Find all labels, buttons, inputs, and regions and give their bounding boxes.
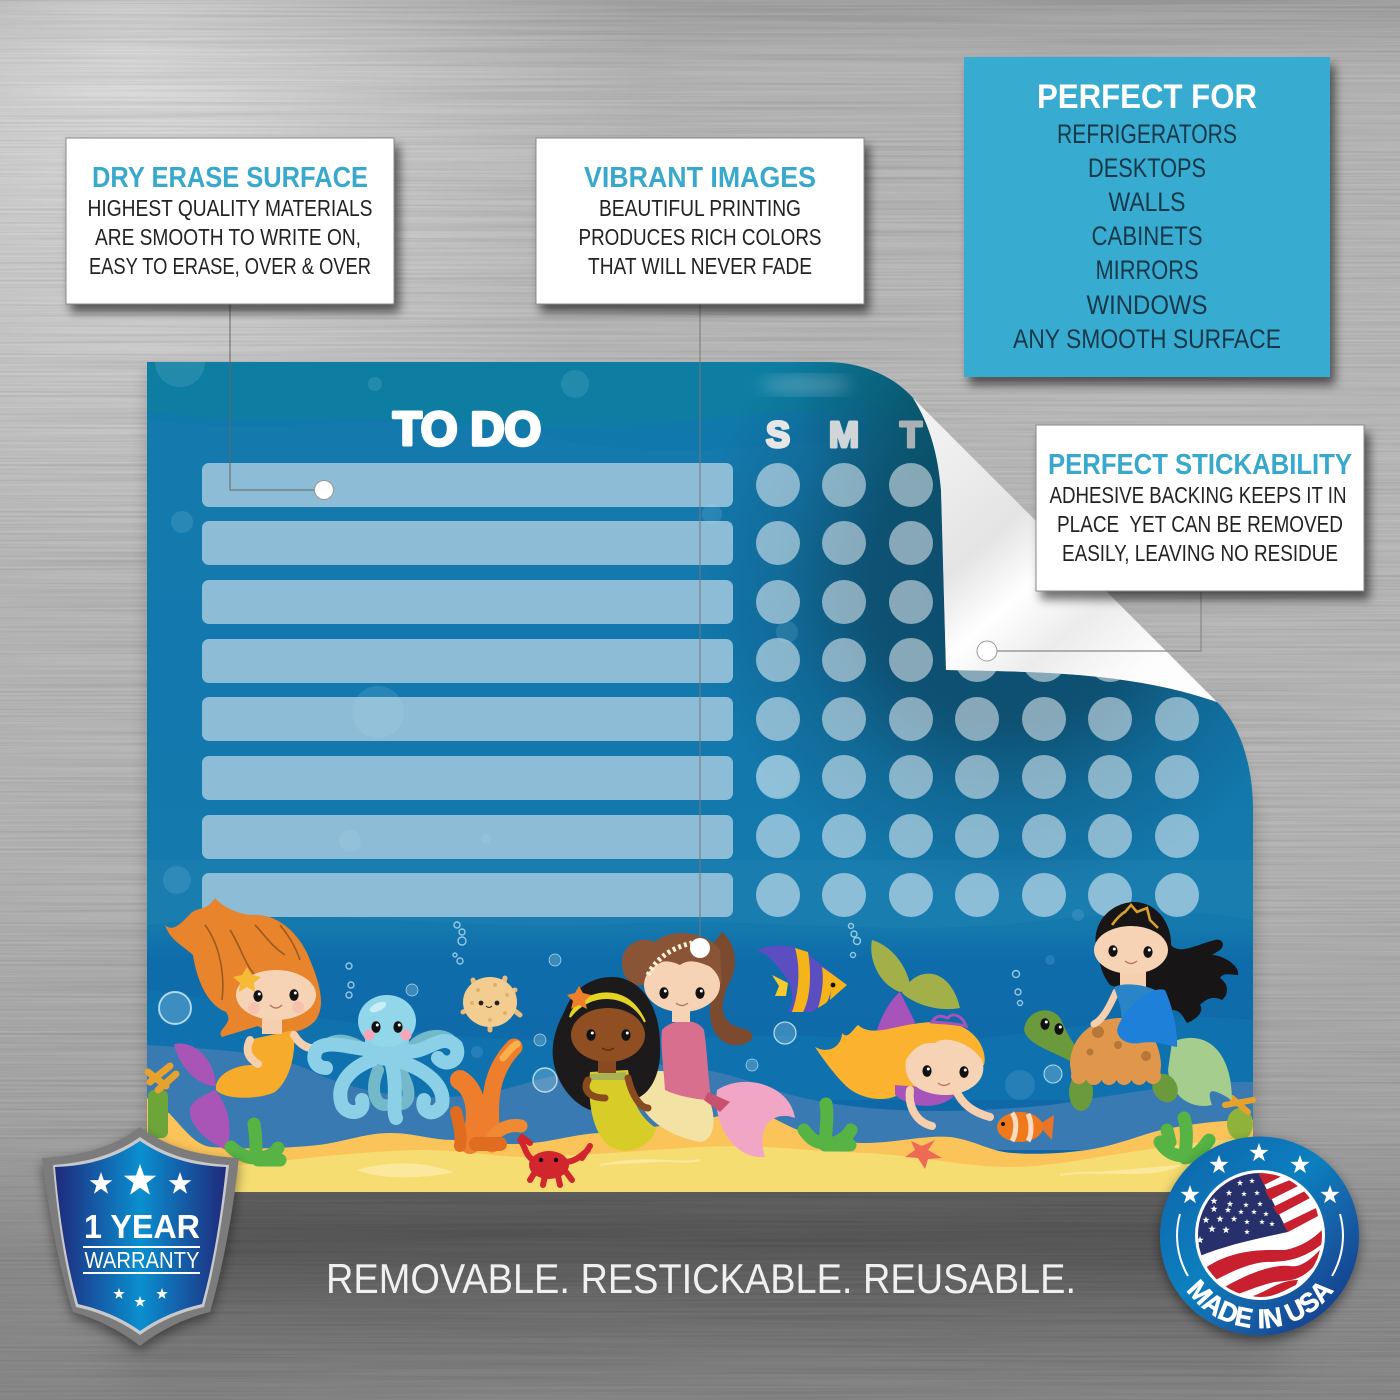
leader line: stickability xyxy=(977,591,1201,661)
sheet background xyxy=(147,362,1253,1192)
starfish xyxy=(905,1140,942,1169)
callout: perfect for xyxy=(964,57,1330,377)
tagline: REMOVABLE. RESTICKABLE. REUSABLE. xyxy=(326,1255,1076,1302)
callout: perfect stickability xyxy=(1036,425,1364,591)
callout: perfect stickability: PLACE YET CAN BE REMOVED xyxy=(1057,511,1343,537)
orange coral xyxy=(456,1044,521,1146)
callout: dry erase surface: HIGHEST QUALITY MATERIALS xyxy=(88,195,372,221)
sheet drop shadow xyxy=(147,370,1255,1200)
callout: perfect for: CABINETS xyxy=(1092,221,1202,251)
callout: dry erase surface: DRY ERASE SURFACE xyxy=(92,162,368,194)
badge: made in USA: MADE IN USA xyxy=(1186,1278,1334,1328)
callout: perfect for: WALLS xyxy=(1108,187,1186,217)
callout: dry erase surface xyxy=(66,138,394,304)
mermaid with turtle xyxy=(1024,902,1238,1111)
callout: perfect for: MIRRORS xyxy=(1096,255,1198,285)
task rows xyxy=(202,463,733,917)
mermaid with dark skin and yellow headband xyxy=(553,977,660,1151)
callout: perfect for: DESKTOPS xyxy=(1088,153,1206,183)
callout: vibrant images: THAT WILL NEVER FADE xyxy=(588,253,812,279)
tropical fish xyxy=(756,946,847,1012)
green seaweed middle xyxy=(804,1104,851,1145)
callout: vibrant images xyxy=(536,138,864,304)
day headers: T xyxy=(900,414,922,455)
badge: made in USA xyxy=(1156,1134,1366,1346)
white peeled adhesive backing xyxy=(913,398,1217,702)
day check circles xyxy=(756,463,1199,917)
american flag xyxy=(1195,1172,1322,1298)
callout: vibrant images: VIBRANT IMAGES xyxy=(584,162,816,194)
heading: TO DO: TO DO xyxy=(393,402,541,455)
callout: perfect stickability: PERFECT STICKABILITY xyxy=(1048,449,1352,481)
badge: 1 year warranty shield: WARRANTY xyxy=(84,1247,200,1273)
green seaweed right xyxy=(1160,1118,1209,1158)
mermaid with brown hair xyxy=(622,932,795,1157)
leader line: dry erase xyxy=(230,304,334,500)
leader line: vibrant images xyxy=(690,304,710,958)
callout: perfect for: REFRIGERATORS xyxy=(1057,119,1237,149)
callout: perfect for: WINDOWS xyxy=(1086,290,1208,320)
badge: 1 year warranty shield xyxy=(42,1127,239,1346)
dry erase mermaid chart sheet xyxy=(144,362,1256,1192)
green seaweed left xyxy=(231,1124,280,1160)
badge: 1 year warranty shield: 1 YEAR xyxy=(84,1208,200,1245)
day headers: M xyxy=(829,414,859,455)
mermaid with blonde hair xyxy=(815,940,990,1126)
callout: perfect stickability: EASILY, LEAVING NO RESIDUE xyxy=(1062,540,1338,566)
crab xyxy=(520,1137,590,1185)
seabed plants right xyxy=(1225,1098,1253,1140)
callout: dry erase surface: EASY TO ERASE, OVER & OVER xyxy=(89,253,371,279)
pufferfish xyxy=(463,977,520,1030)
callout: vibrant images: BEAUTIFUL PRINTING xyxy=(599,195,801,221)
callout: perfect for: PERFECT FOR xyxy=(1037,78,1257,116)
mermaid with orange hair xyxy=(165,898,330,1150)
water waves and sand xyxy=(147,362,1253,1192)
bubbles xyxy=(155,337,1084,1100)
page curl shading xyxy=(723,362,1242,868)
day headers: S xyxy=(766,414,790,455)
callout: perfect for: ANY SMOOTH SURFACE xyxy=(1013,324,1281,354)
day headers xyxy=(766,414,922,455)
clownfish xyxy=(997,1112,1054,1142)
seabed plants left xyxy=(148,1066,176,1138)
callout: dry erase surface: ARE SMOOTH TO WRITE ON, xyxy=(95,224,361,250)
octopus xyxy=(314,995,457,1118)
callout: vibrant images: PRODUCES RICH COLORS xyxy=(578,224,822,250)
